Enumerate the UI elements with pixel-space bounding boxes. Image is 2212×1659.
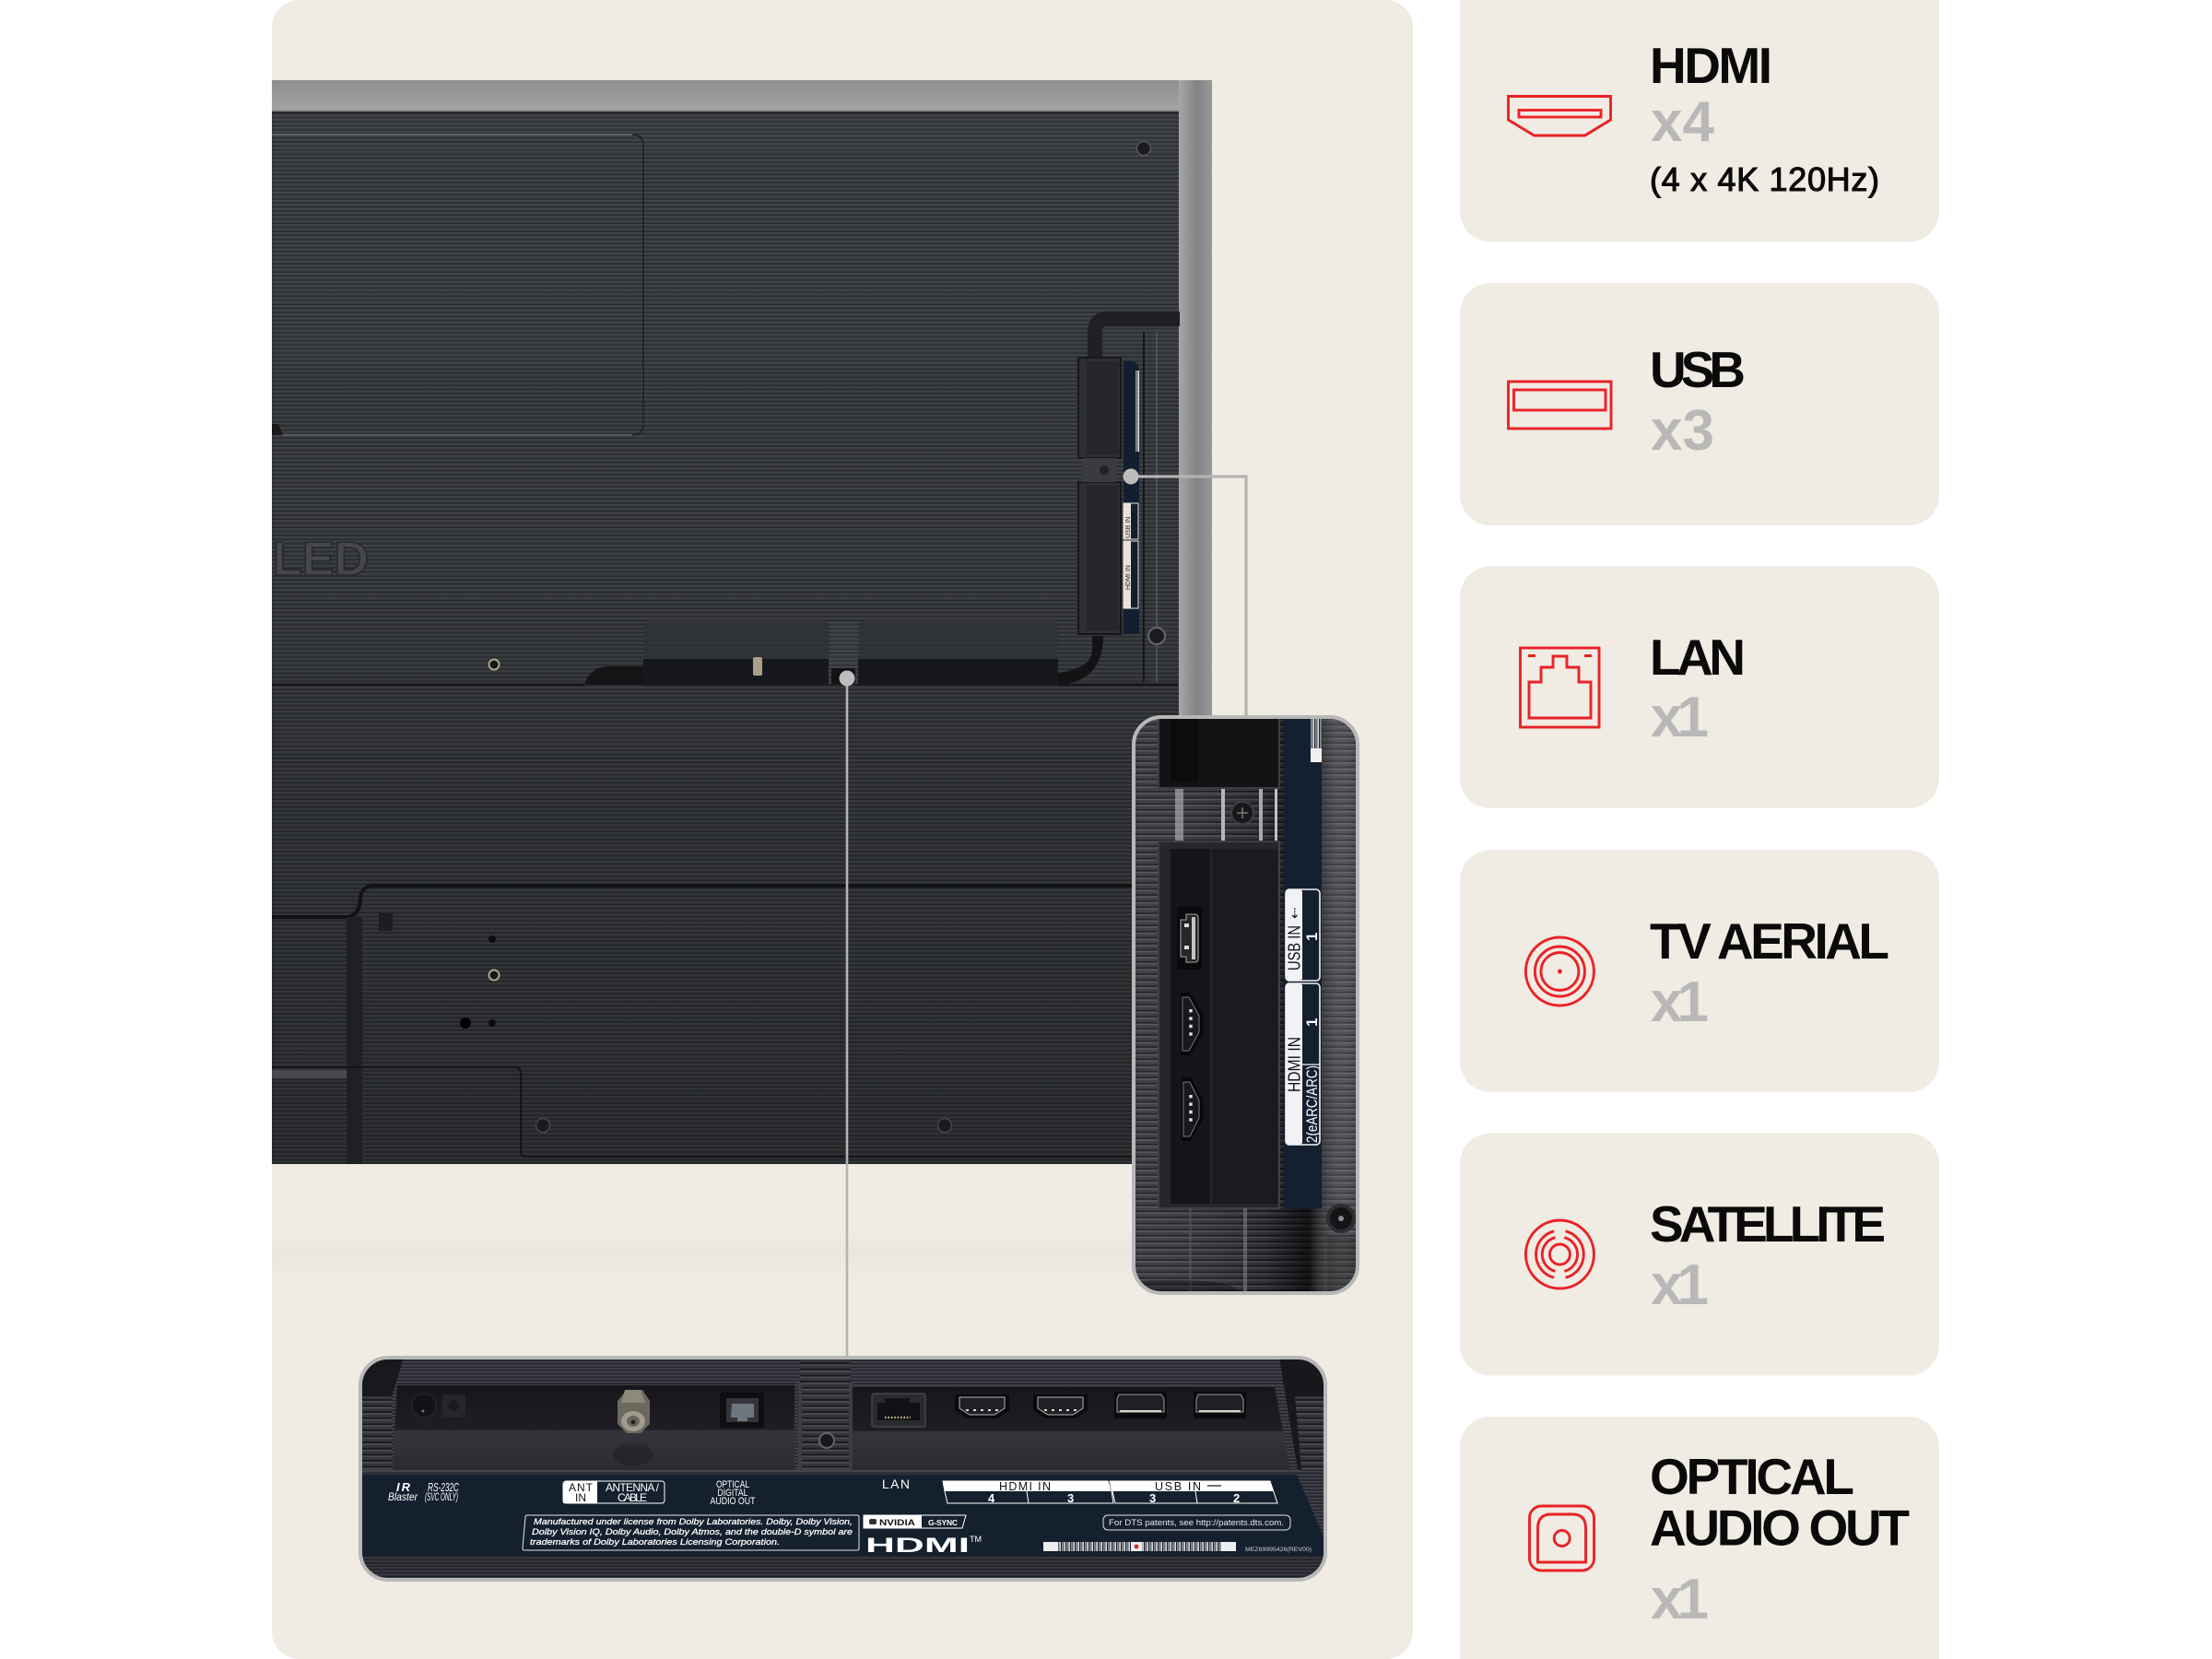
lower screw (1328, 1206, 1354, 1231)
USB sockets (1114, 1392, 1246, 1418)
card: USB (1460, 283, 1939, 525)
ANT IN label: IN (575, 1491, 586, 1504)
SATELLITE count: x1 (1651, 1253, 1709, 1317)
LAN count: x1 (1651, 686, 1709, 749)
USB port (1177, 907, 1202, 970)
IR Blaster label: Blaster (388, 1490, 418, 1503)
center bracket (798, 1358, 853, 1471)
TV back photo (272, 80, 1212, 1164)
label strip (362, 1475, 1324, 1556)
lower access panel (272, 886, 1178, 917)
optical socket (720, 1393, 764, 1428)
card: Optical audio out (1460, 1417, 1939, 1659)
USB IN label: 3 (1149, 1491, 1156, 1505)
icon: optical socket (1530, 1506, 1594, 1571)
USB IN label: ⇠ (1287, 907, 1303, 919)
port cavity right (853, 1387, 1290, 1470)
icon: LAN port (1521, 648, 1599, 727)
upper access panel outline (272, 135, 643, 435)
HDMI IN label (1285, 983, 1321, 1145)
ANT IN label: CABLE (618, 1491, 647, 1504)
USB IN label: USB IN (1155, 1480, 1201, 1493)
NVIDIA G-SYNC badge: NVIDIA (879, 1518, 916, 1527)
SATELLITE heading: SATELLITE (1650, 1195, 1886, 1253)
HDMI logo (865, 1534, 982, 1557)
Dolby licence box: Manufactured under license from Dolby Laboratories. Dolby, Dolby Vision, (534, 1517, 853, 1527)
USB IN label: USB IN (1285, 925, 1303, 971)
port pockets (643, 659, 829, 685)
icon: satellite socket (1525, 1220, 1594, 1288)
USB heading: USB (1650, 341, 1746, 398)
OPTICAL AUDIO OUT heading: AUDIO OUT (1650, 1499, 1910, 1556)
port housing (1159, 841, 1279, 1208)
icon: USB port (1508, 382, 1611, 429)
TV back photo: USB IN (1125, 517, 1132, 538)
NVIDIA G-SYNC badge: G-SYNC (928, 1518, 958, 1527)
TV back photo: HDMI IN (1125, 565, 1132, 590)
USB IN label (1285, 889, 1321, 981)
horizontal body step (272, 684, 584, 686)
HDMI spec: (4 x 4K 120Hz) (1650, 160, 1879, 198)
card: Satellite (1460, 1134, 1939, 1375)
part number: MEZ69995426(REV00) (1245, 1547, 1312, 1553)
darker lower band (360, 1556, 1325, 1580)
HDMI IN label: 3 (1067, 1491, 1074, 1505)
panel: TV rear view (272, 0, 1413, 1659)
DTS patents box (1103, 1515, 1290, 1530)
side label strip (1124, 361, 1139, 634)
OPTICAL AUDIO OUT heading: OPTICAL (1650, 1448, 1854, 1505)
barcode (1043, 1542, 1236, 1551)
ANT IN label: ANTENNA / (606, 1481, 660, 1494)
silver coax in pocket (753, 657, 762, 676)
HDMI IN label: 4 (988, 1491, 995, 1505)
card: LAN (1460, 566, 1939, 808)
card: HDMI (1460, 0, 1939, 241)
inset: bottom ports close-up (359, 1356, 1327, 1582)
left and right corner pieces (362, 1359, 404, 1396)
HDMI IN label: 1 (1303, 1018, 1321, 1027)
LAN socket (872, 1394, 925, 1427)
lower fold (1243, 1208, 1247, 1293)
coax connector (613, 1390, 653, 1465)
ANT IN label (563, 1481, 665, 1504)
metal rails (1175, 788, 1183, 841)
USB count: x3 (1651, 399, 1714, 463)
HDMI count: x4 (1651, 90, 1714, 154)
USB IN label: 1 (1303, 933, 1321, 941)
HDMI logo: TM (970, 1535, 982, 1544)
LAN label: LAN (882, 1477, 910, 1491)
HDMI ports (1181, 993, 1203, 1141)
RS-232C label: RS-232C (428, 1480, 459, 1494)
icon: HDMI port (1508, 96, 1611, 135)
RS-232C label (425, 1483, 459, 1502)
card: TV aerial (1460, 850, 1939, 1092)
HDMI IN label: HDMI IN (999, 1480, 1051, 1493)
DTS patents box: For DTS patents, see http://patents.dts.com. (1109, 1518, 1284, 1528)
IR Blaster label: IR (396, 1480, 411, 1494)
RS-232C label: (SVC ONLY) (425, 1490, 458, 1503)
connector line: side ports (1123, 468, 1246, 717)
connector line: bottom ports (839, 671, 855, 1357)
upper port housing (1159, 715, 1279, 788)
USB IN label: 2 (1233, 1491, 1240, 1505)
LED lettering: LED (273, 533, 369, 586)
label strip (1284, 715, 1322, 1208)
USB IN label (1110, 1480, 1277, 1505)
Dolby licence box: trademarks of Dolby Laboratories Licensing Corporation. (530, 1537, 780, 1547)
icon: aerial socket (1525, 937, 1594, 1006)
screw (1231, 802, 1253, 824)
LAN heading: LAN (1650, 629, 1746, 686)
inset: side ports close-up (1132, 715, 1359, 1295)
port cavity left (393, 1385, 794, 1470)
Dolby licence box: Dolby Vision IQ, Dolby Audio, Dolby Atmos, and the double-D symbol are (532, 1527, 853, 1537)
ANT IN label: ANT (569, 1481, 594, 1494)
HDMI logo: HDMI (865, 1534, 970, 1557)
HDMI IN label (943, 1480, 1113, 1505)
NVIDIA G-SYNC badge (864, 1515, 966, 1528)
side connector blocks (1078, 358, 1121, 458)
OPTICAL count: x1 (1651, 1568, 1709, 1631)
HDMI heading: HDMI (1650, 37, 1772, 94)
side cable channel (1095, 319, 1180, 359)
OPTICAL AUDIO OUT heading (1650, 1448, 1910, 1556)
IR Blaster label (388, 1483, 418, 1500)
optical label: OPTICAL (716, 1479, 749, 1490)
HDMI IN label: HDMI IN (1285, 1037, 1303, 1092)
optical label (710, 1480, 756, 1504)
HDMI IN label: 2(eARC/ARC) (1303, 1065, 1321, 1143)
HDMI sockets (955, 1394, 1088, 1418)
Dolby licence box (523, 1515, 859, 1550)
optical label: DIGITAL (717, 1488, 748, 1499)
optical label: AUDIO OUT (710, 1496, 756, 1507)
TV AERIAL heading: TV AERIAL (1650, 912, 1889, 970)
IR and RS-232 jacks (412, 1394, 465, 1418)
mounting holes and screws (488, 660, 500, 669)
TV AERIAL count: x1 (1651, 971, 1709, 1034)
